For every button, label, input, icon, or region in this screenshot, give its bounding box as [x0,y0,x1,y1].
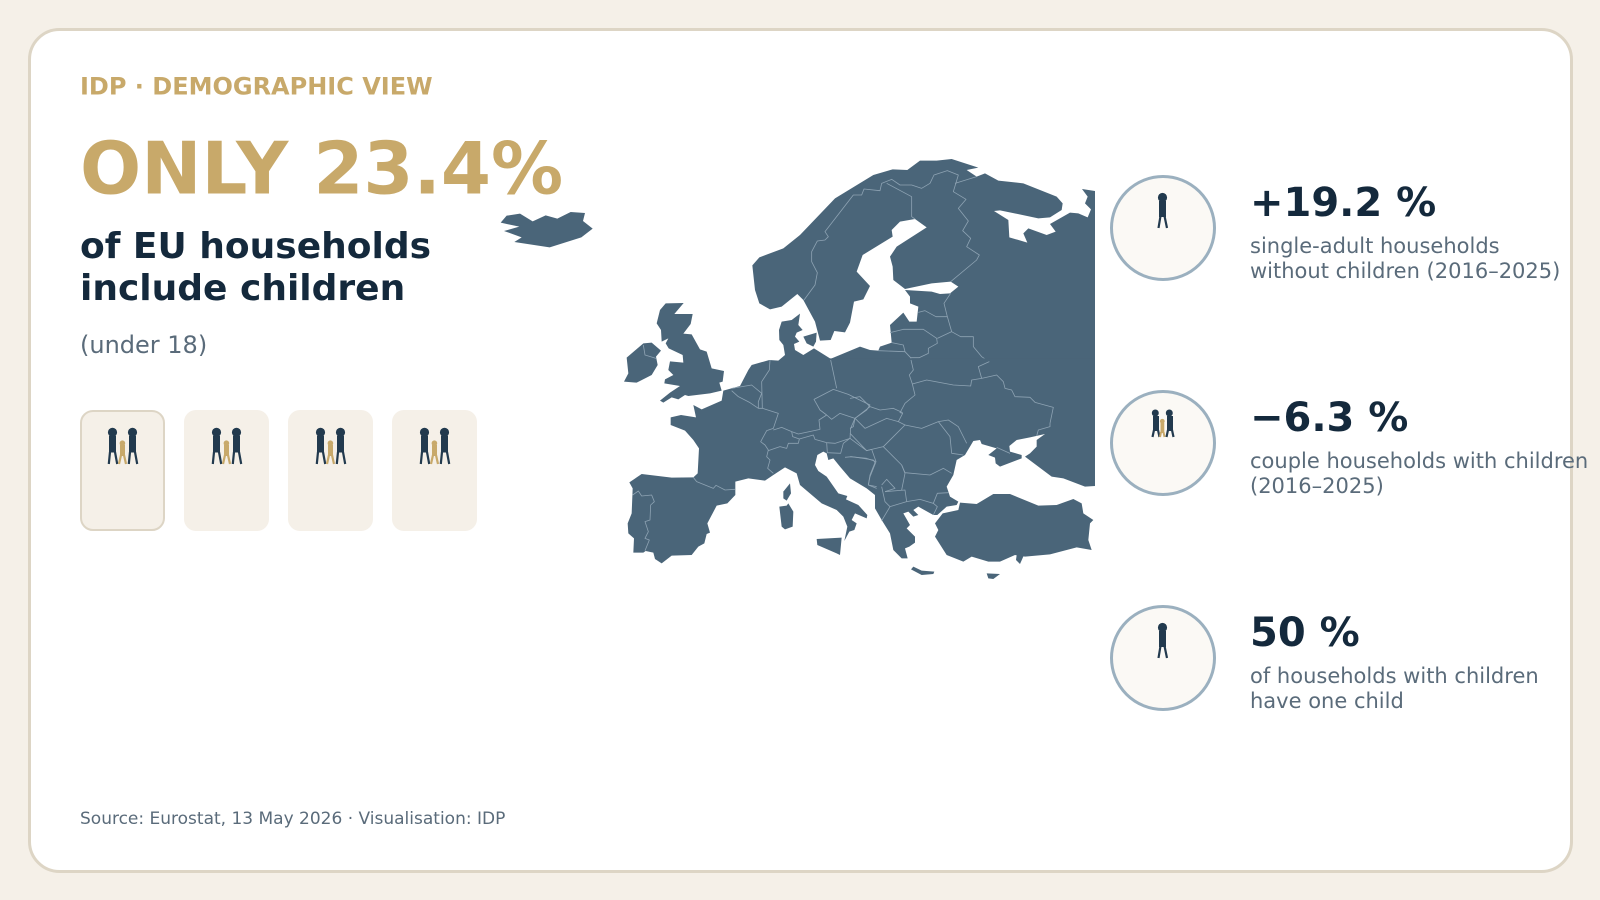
headline: of EU households [80,226,431,267]
Sicily [817,538,842,555]
eyebrow: IDP · DEMOGRAPHIC VIEW [80,72,433,100]
United Kingdom [657,303,724,403]
stat 1 value: +19.2 % [1250,180,1436,226]
stat 1 description: without children (2016–2025) [1250,259,1560,283]
source line: Source: Eurostat, 13 May 2026 · Visualisation: IDP [80,809,505,829]
stat 2 value: −6.3 % [1250,395,1408,441]
card 2 [184,410,269,531]
stat 3 circle icon: single adult [1112,606,1214,710]
Iceland [501,212,593,247]
map of Europe [501,159,1095,579]
card 4 [392,410,477,531]
national borders east [850,360,1053,521]
Corsica [783,483,791,501]
subtitle: (under 18) [80,331,207,359]
mainland [628,314,1095,563]
stat 3 description: of households with children [1250,664,1539,688]
Ireland [624,343,661,383]
Sardinia [779,503,793,529]
title: ONLY 23.4% [80,126,563,210]
stat 1 description: single-adult households [1250,234,1500,258]
headline: include children [80,268,405,309]
stat 1 circle icon: single adult [1112,176,1214,280]
stat 3 description: have one child [1250,689,1404,713]
stat 2 description: couple households with children [1250,449,1588,473]
Scandinavia, Finland, Baltics and Russia [752,159,1095,373]
stat 2 circle icon: couple with child [1112,392,1214,494]
stat 2 [1112,392,1588,498]
Crete [911,567,934,575]
stat 3 value: 50 % [1250,610,1360,656]
card 1 highlighted [81,411,164,530]
stat 1 [1112,176,1560,283]
stat 1 description [1250,234,1560,283]
western and central Europe, Ukraine, Balkans [624,303,1095,563]
headline [80,226,431,309]
Turkey [935,494,1093,562]
stat 3 description [1250,664,1539,713]
card 3 [288,410,373,531]
stat 2 description [1250,449,1588,498]
Cyprus [987,573,1000,579]
stat 2 description: (2016–2025) [1250,474,1384,498]
national borders west [633,360,877,551]
eastern Europe, Turkey and islands [850,360,1093,579]
household icon cards [81,410,477,531]
stat 3 [1112,606,1539,713]
